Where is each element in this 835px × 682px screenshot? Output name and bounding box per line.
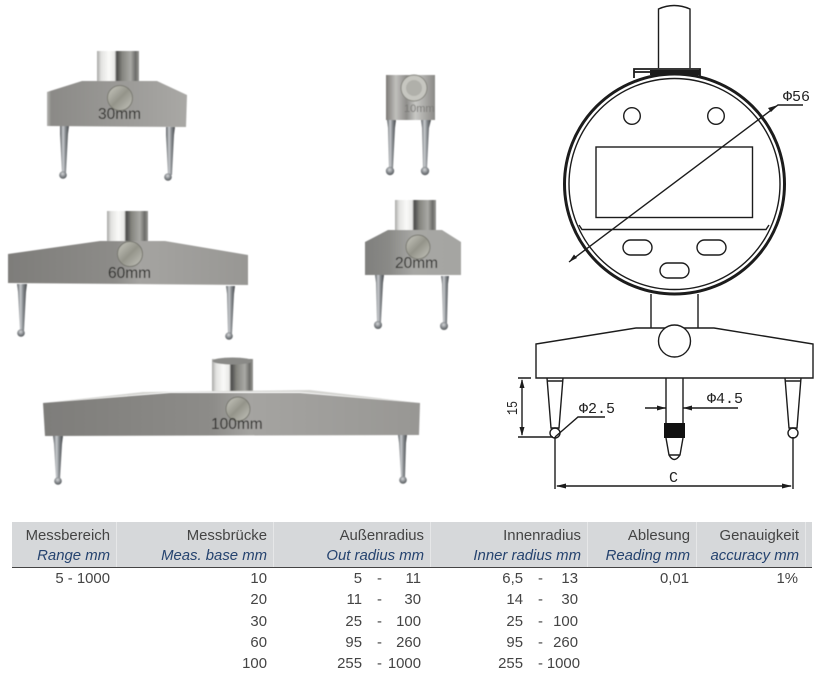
LCD display <box>596 147 752 218</box>
right pin <box>785 378 801 428</box>
dimension 4.5 lines <box>645 407 738 409</box>
dimension arrowheads <box>520 105 792 488</box>
column: outer radius: 255 <box>337 656 362 672</box>
photo: 100mm measuring bridge <box>43 358 420 485</box>
column: measuring base: 10 <box>250 571 267 587</box>
gauge housing <box>564 74 784 294</box>
photo: 10mm measuring bridge <box>386 75 435 175</box>
column: inner radius: 255 <box>498 656 523 672</box>
technical drawing: digital dial gauge with bridge <box>518 6 813 489</box>
photo: 30mm measuring bridge <box>47 51 187 181</box>
column: inner radius: - <box>538 571 543 587</box>
display lower edge <box>579 225 769 230</box>
column: outer radius: - <box>377 656 382 672</box>
gauge clip <box>634 69 700 78</box>
column: inner radius: 13 <box>561 571 578 587</box>
column: outer radius: - <box>377 614 382 630</box>
column: outer radius: 11 <box>406 571 421 587</box>
dimension labels <box>505 89 810 487</box>
photo: 60mm measuring bridge: 60mm <box>108 265 151 282</box>
table column headings: English: accuracy mm <box>710 548 799 564</box>
column: inner radius: 95 <box>506 635 523 651</box>
column: measuring base: 30 <box>250 614 267 630</box>
table column headings: German: Innenradius <box>503 528 581 544</box>
column: outer radius: - <box>377 635 382 651</box>
photo: 20mm measuring bridge <box>365 200 461 330</box>
column: inner radius: 100 <box>553 614 578 630</box>
table column headings: German: Messbrücke <box>187 528 267 544</box>
column: range, reading, accuracy: 5 - 1000 <box>55 571 110 587</box>
column: outer radius: 25 <box>345 614 362 630</box>
gauge plunger <box>658 6 690 68</box>
column: measuring base: 100 <box>242 656 267 672</box>
dimension 2.5 leader <box>555 417 605 437</box>
column: inner radius: - <box>538 635 543 651</box>
column: measuring base: 20 <box>250 592 267 608</box>
table data <box>55 571 798 672</box>
table header band <box>12 522 812 568</box>
column: range, reading, accuracy: 0,01 <box>660 571 689 587</box>
column: measuring base <box>242 571 267 672</box>
table column headings: English: Out radius mm <box>326 548 424 564</box>
column: inner radius <box>498 571 580 672</box>
dimension C lines <box>555 437 793 489</box>
diameter line 56 <box>569 105 803 262</box>
neck <box>651 294 698 328</box>
left pin <box>547 378 563 428</box>
photo: 20mm measuring bridge: 20mm <box>395 255 438 272</box>
column: inner radius: 25 <box>506 614 523 630</box>
table column headings: English: Inner radius mm <box>473 548 581 564</box>
column: outer radius: 100 <box>396 614 421 630</box>
column: range, reading, accuracy: 1% <box>776 571 798 587</box>
column: outer radius: - <box>377 592 382 608</box>
dimension labels: Φ4.5 <box>707 391 743 408</box>
table column headings: English: Meas. base mm <box>161 548 267 564</box>
column: inner radius: 1000 <box>547 656 580 672</box>
bridge outline <box>536 328 813 378</box>
table column headings: German <box>26 528 800 544</box>
dimension labels: C <box>669 470 678 487</box>
column: inner radius: 30 <box>561 592 578 608</box>
photo: 60mm measuring bridge <box>8 211 248 340</box>
column: outer radius: 5 <box>354 571 362 587</box>
table column headings: English: Reading mm <box>606 548 690 564</box>
column: range, reading, accuracy <box>55 571 798 587</box>
table column headings: English: Range mm <box>37 548 110 564</box>
column: outer radius: 11 <box>347 592 362 608</box>
photo: 30mm measuring bridge: 30mm <box>98 106 141 123</box>
column: inner radius: 14 <box>506 592 523 608</box>
dimension labels: Φ2.5 <box>579 401 615 418</box>
gauge buttons <box>623 240 726 278</box>
column: inner radius: 260 <box>553 635 578 651</box>
column: outer radius: 95 <box>345 635 362 651</box>
table column headings: German: Genauigkeit <box>720 528 800 544</box>
photo: 100mm measuring bridge: 100mm <box>211 416 263 433</box>
column: outer radius: - <box>377 571 382 587</box>
table column headings: German: Ablesung <box>628 528 690 544</box>
dimension labels: Φ56 <box>783 89 810 106</box>
column: outer radius <box>337 571 421 672</box>
gauge clip dark bar <box>650 70 700 75</box>
column: inner radius: - <box>538 592 543 608</box>
column: inner radius: - <box>538 656 543 672</box>
column: measuring base: 60 <box>250 635 267 651</box>
photo: 10mm measuring bridge: 10mm <box>404 103 435 115</box>
column: inner radius: 6,5 <box>502 571 523 587</box>
column: outer radius: 30 <box>404 592 421 608</box>
column: outer radius: 1000 <box>388 656 421 672</box>
table column headings: German: Messbereich <box>26 528 110 544</box>
column: outer radius: 260 <box>396 635 421 651</box>
center stem <box>666 378 683 423</box>
dimension 15 lines <box>518 378 553 437</box>
dimension labels: 15 <box>505 401 522 415</box>
gauge holes <box>624 108 724 124</box>
table column headings: English <box>37 548 799 564</box>
table column headings: German: Außenradius <box>340 528 424 544</box>
bridge knob <box>658 325 690 357</box>
column: inner radius: - <box>538 614 543 630</box>
